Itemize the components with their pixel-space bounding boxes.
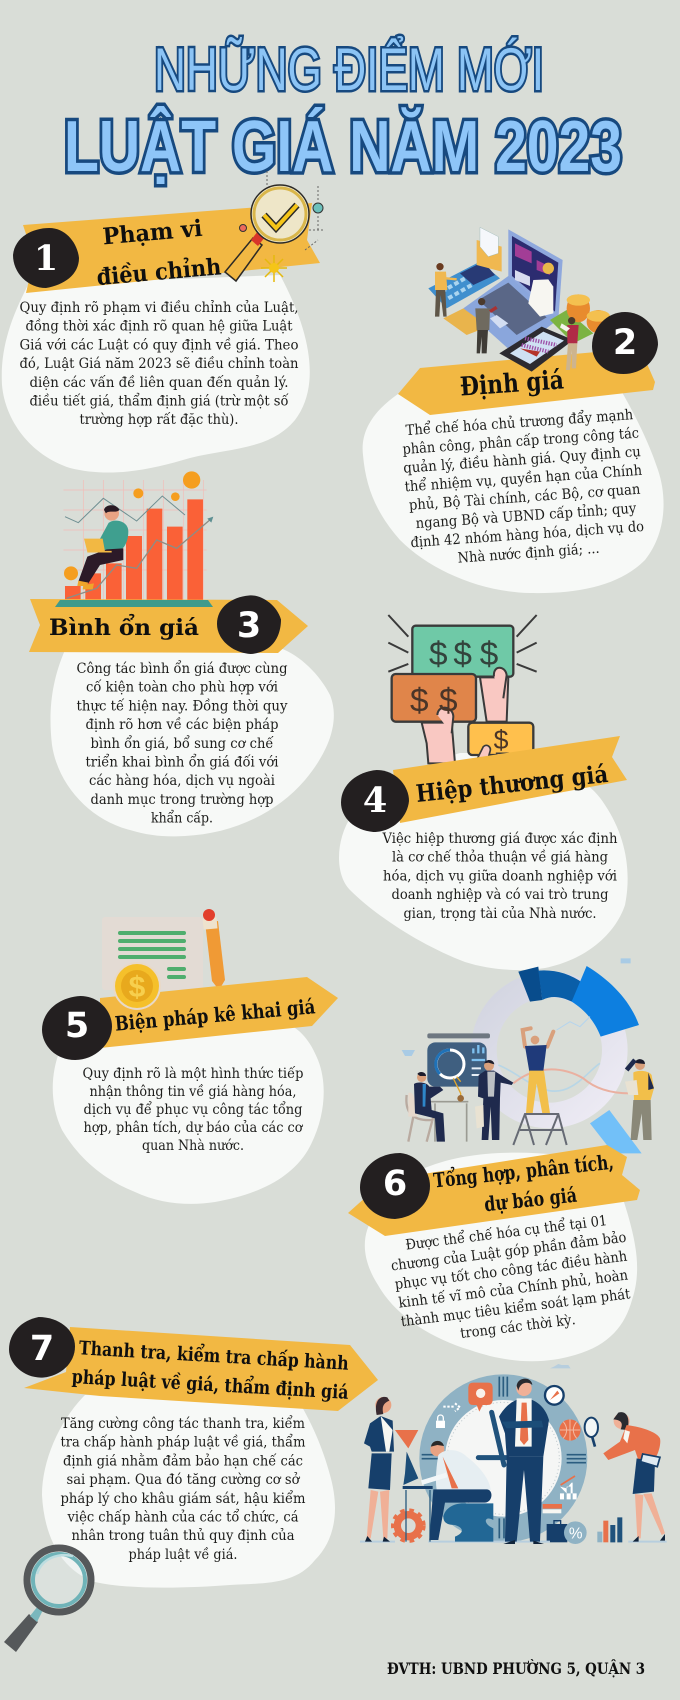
illustration: document and pencil: [102, 909, 225, 990]
text 2: Thể chế hóa chủ trương đẩy mạnh: [405, 405, 634, 439]
heading 4: Hiệp thương giá: [414, 759, 609, 808]
icon: coin: [113, 962, 161, 1010]
banner 6: [348, 1145, 640, 1236]
text 3: cố kiện toàn cho phù hợp với: [86, 679, 278, 696]
number 5: 5: [65, 1006, 89, 1046]
text 7: [60, 1414, 306, 1563]
panel 7: thanh tra, kiểm tra: [4, 1317, 667, 1652]
text 4: Việc hiệp thương giá được xác định: [382, 831, 618, 847]
text 6: trong các thời kỳ.: [459, 1312, 576, 1342]
text 6: kinh tế vĩ mô của Chính phủ, hoàn: [398, 1267, 629, 1312]
panel 6: tổng hợp, phân tích, dự báo giá: [348, 958, 654, 1361]
text 7: sai phạm. Qua đó tăng cường cơ sở: [66, 1471, 301, 1488]
heading 7: [71, 1335, 351, 1404]
heading 7: Thanh tra, kiểm tra chấp hành: [78, 1335, 349, 1375]
number 6: [360, 1153, 430, 1219]
blob 1: [2, 275, 310, 473]
text 7: định giá nhằm đảm bảo hạn chế các: [63, 1451, 303, 1469]
illustration: bar chart and person: [63, 471, 213, 601]
text 1: đồng thời xác định rõ quan hệ giữa Luật: [26, 318, 293, 335]
text 1: trường hợp rất đặc thù).: [80, 411, 238, 428]
text 2: phân công, phân cấp trong công tác: [402, 425, 640, 458]
number 2: [592, 312, 658, 374]
number 7: 7: [30, 1329, 54, 1369]
heading 3: Bình ổn giá: [49, 613, 199, 641]
text 5: [82, 1065, 304, 1154]
banner 3: [29, 599, 308, 653]
text 7: pháp luật về giá.: [128, 1546, 238, 1563]
number 3: 3: [237, 606, 261, 646]
banner 5: [100, 977, 338, 1048]
illustration: hands holding money: [388, 615, 537, 763]
text 7: pháp lý cho khâu giám sát, hậu kiểm: [60, 1489, 306, 1507]
text 3: [76, 659, 288, 827]
blob 6: [365, 1153, 637, 1361]
heading 1: Phạm vi: [101, 215, 204, 250]
text 4: doanh nghiệp và có vai trò trung: [392, 886, 608, 903]
illustration: team and clock: [360, 1364, 667, 1544]
number 4: 4: [363, 780, 387, 821]
illustration: hands holding money: $: [494, 725, 509, 755]
text 4: [382, 831, 618, 922]
text 6: Được thể chế hóa cụ thể tại 01: [404, 1211, 608, 1254]
text 4: là cơ chế thỏa thuận về giá hàng: [392, 849, 608, 866]
text 2: quản lý, điều hành giá. Quy định cụ: [403, 443, 641, 477]
illustration: hands holding money: $: [429, 636, 448, 673]
text 7: nhân trong tuân thủ quy định của: [72, 1527, 295, 1544]
illustration: hands holding money: $: [480, 636, 498, 673]
blob 5: [53, 1025, 324, 1204]
text 2: [400, 405, 648, 570]
illustration: hands holding money: $: [453, 636, 472, 673]
panel 2: định giá: [363, 227, 664, 593]
title: [64, 36, 622, 187]
number 4: [341, 770, 409, 832]
text 2: Nhà nước định giá; ...: [457, 540, 600, 567]
number 6: 6: [383, 1164, 407, 1204]
number 1: 1: [34, 238, 58, 279]
text 7: Tăng cường công tác thanh tra, kiểm: [61, 1414, 305, 1432]
number 7: [9, 1317, 75, 1378]
text 6: [388, 1209, 637, 1350]
text 3: bình ổn giá, bổ sung cơ chế: [90, 734, 274, 752]
text 6: phục vụ tốt cho công tác điều hành: [394, 1248, 628, 1293]
text 2: thể nhiệm vụ, quyền hạn của Chính: [404, 461, 643, 495]
number 5: [42, 996, 112, 1060]
heading 5: Biện pháp kê khai giá: [114, 994, 316, 1036]
illustration: team and clock: %: [569, 1525, 583, 1542]
text 4: gian, trọng tài của Nhà nước.: [404, 905, 596, 922]
chart base: [55, 600, 213, 607]
illustration: hands holding money: $: [410, 683, 429, 720]
icon: coin: $: [129, 971, 146, 1004]
panel 4: hiệp thương giá: [339, 615, 628, 970]
text 2: định 42 nhóm hàng hóa, dịch vụ do: [410, 518, 645, 551]
text 6: thành mục tiêu kiểm soát lạm phát: [400, 1284, 631, 1330]
text 6: chương của Luật góp phần đảm bảo: [390, 1229, 627, 1274]
banner 7: [24, 1327, 378, 1411]
banner 2: [398, 348, 655, 415]
icon: magnifier with check: [225, 170, 325, 282]
banner 4: [393, 736, 627, 823]
illustration: hands holding money: $: [439, 683, 458, 720]
text 5: dịch vụ để phục vụ công tác tổng: [84, 1100, 302, 1118]
text 7: việc chấp hành của các tổ chức, cá: [67, 1508, 299, 1526]
number 1: [13, 228, 79, 288]
text 1: diện các vấn đề liên quan đến quản lý.: [30, 374, 288, 391]
banner 1: [23, 203, 320, 293]
text 3: triển khai bình ổn giá đối với: [86, 752, 279, 770]
heading 6: [432, 1149, 618, 1221]
text 3: các hàng hóa, dịch vụ ngoài: [89, 772, 275, 789]
heading 1: [92, 213, 223, 291]
text 2: phủ, Bộ Tài chính, các Bộ, cơ quan: [408, 481, 641, 514]
text 1: [20, 299, 298, 428]
panel 5: biện pháp kê khai giá: [42, 909, 338, 1204]
heading 1: điều chỉnh: [96, 253, 223, 291]
number 2: 2: [613, 323, 637, 363]
illustration: donut chart and analysts: [402, 958, 654, 1153]
text 1: đó, Luật Giá năm 2023 sẽ điều chỉnh toàn: [20, 355, 298, 372]
text 5: Quy định rõ là một hình thức tiếp: [82, 1065, 304, 1082]
panel 3: bình ổn giá: [29, 471, 334, 836]
text 3: thực tế hiện nay. Đồng thời quy: [76, 697, 288, 714]
number 3: [217, 595, 281, 654]
blob 2: [363, 385, 664, 593]
illustration: laptop and finance: [428, 227, 610, 372]
text 1: Giá với các Luật có quy định về giá. Theo: [20, 336, 298, 353]
text 3: danh mục trong trường hợp: [90, 792, 274, 808]
heading 6: dự báo giá: [483, 1183, 578, 1216]
text 5: nhận thông tin về giá hàng hóa,: [90, 1083, 296, 1100]
blob 7: [42, 1395, 335, 1588]
panel 1: phạm vi điều chỉnh: [2, 170, 325, 473]
icon: magnifying glass: [4, 1548, 91, 1652]
text 5: quan Nhà nước.: [142, 1137, 244, 1154]
text 4: hóa, dịch vụ giữa doanh nghiệp với: [383, 868, 617, 884]
text 1: điều tiết giá, thẩm định giá (trừ một số: [30, 392, 289, 410]
blob 3: [51, 648, 334, 836]
text 3: Công tác bình ổn giá được cùng: [76, 659, 288, 677]
text 7: tra chấp hành pháp luật về giá, thẩm: [60, 1433, 306, 1451]
text 5: hợp, phân tích, dự báo của các cơ: [84, 1119, 304, 1136]
text 3: định rõ hơn về các biện pháp: [86, 716, 278, 733]
blob 4: [339, 753, 628, 970]
heading 6: Tổng hợp, phân tích,: [432, 1149, 615, 1192]
text 3: khẩn cấp.: [151, 809, 213, 827]
heading 2: Định giá: [459, 365, 565, 403]
text 2: ngang Bộ và UBND cấp tỉnh; quy: [415, 500, 638, 532]
title line 1: NHỮNG ĐIỂM MỚI: [154, 36, 544, 103]
text 1: Quy định rõ phạm vi điều chỉnh của Luật,: [20, 299, 298, 316]
heading 7: pháp luật về giá, thẩm định giá: [71, 1364, 349, 1404]
